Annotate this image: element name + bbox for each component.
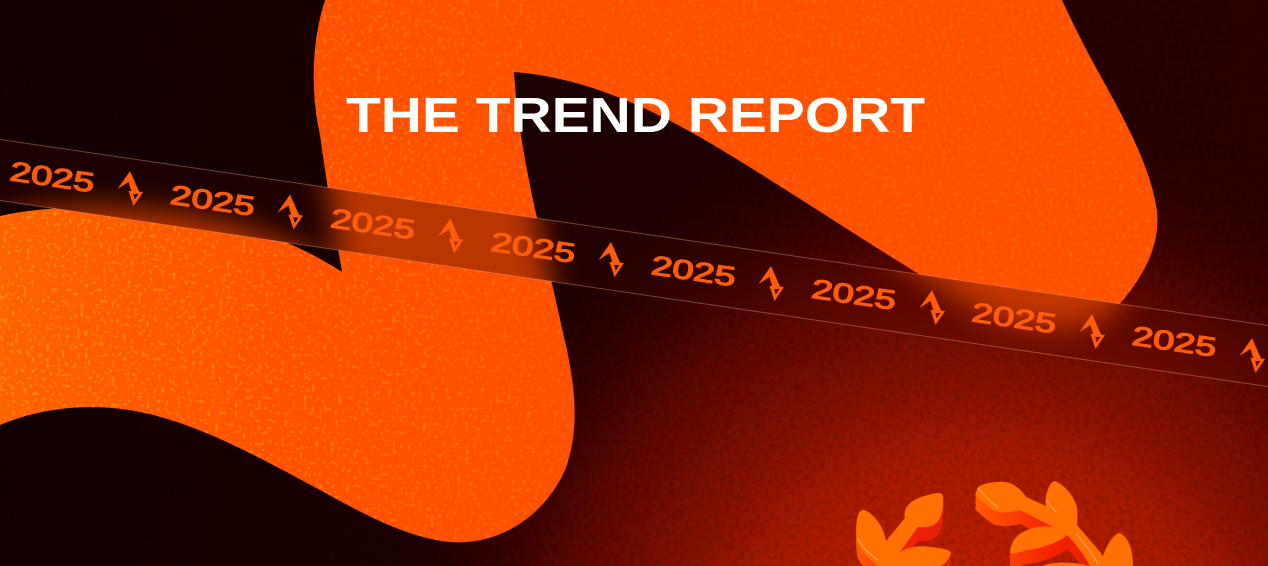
2025 label 2: 2025 xyxy=(168,180,257,222)
2025 label 4: 2025 xyxy=(489,227,577,269)
title: THE TREND REPORT xyxy=(346,89,925,143)
arrow icon 3 xyxy=(438,218,464,254)
2025 label 5: 2025 xyxy=(649,250,738,292)
arrow icon 2 xyxy=(278,194,303,230)
arrow icon 7 xyxy=(1080,314,1105,349)
arrow icon 8 xyxy=(1240,338,1265,373)
ribbon band xyxy=(0,139,1268,387)
arrow icon 1 xyxy=(118,171,143,206)
laurel wreath icon xyxy=(856,481,1133,566)
arrow icon 6 xyxy=(920,290,945,325)
arrow icon 4 xyxy=(598,242,624,277)
2025 label 3: 2025 xyxy=(329,203,417,245)
2025 label 8: 2025 xyxy=(1130,321,1219,363)
2025 label 1: 2025 xyxy=(8,156,97,198)
2025 label 7: 2025 xyxy=(970,297,1058,339)
2025 label 6: 2025 xyxy=(810,274,898,316)
arrow icon 5 xyxy=(758,266,784,301)
